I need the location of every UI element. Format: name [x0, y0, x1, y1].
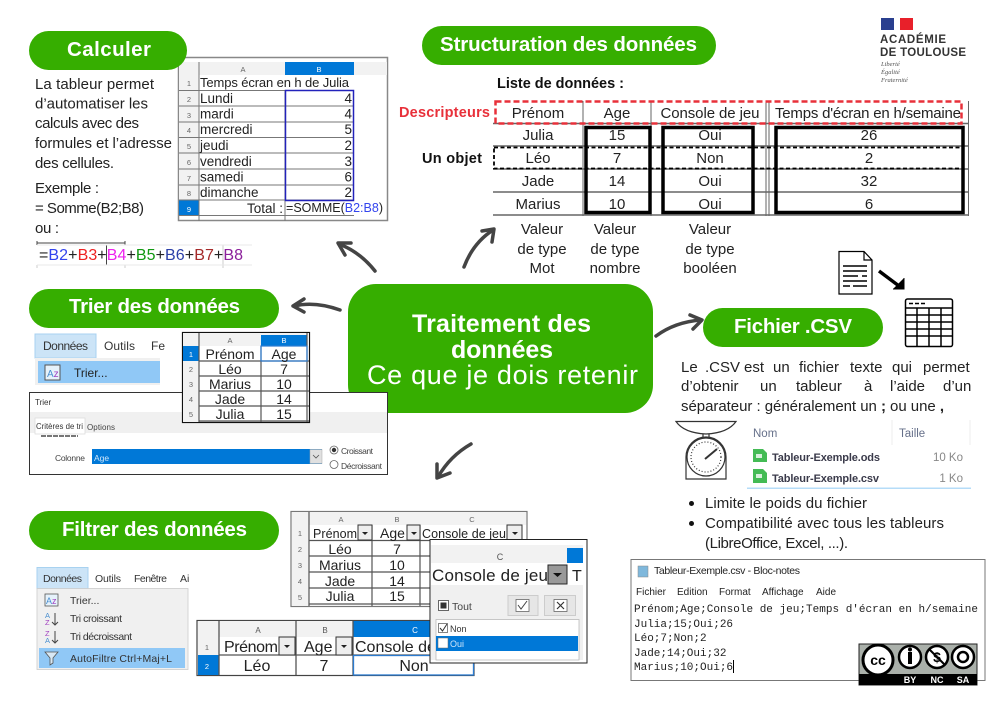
table: liste de données: Marius — [515, 196, 561, 213]
panel: spreadsheet calculer: vendredi — [200, 154, 252, 169]
panel: file list: Nom — [753, 428, 777, 440]
text: types de valeurs: Valeur — [594, 221, 636, 238]
table: résultat du filtre: 2 — [205, 662, 209, 671]
panel: spreadsheet calculer: 4 — [187, 126, 191, 135]
panel: menu AutoFiltre: Données — [43, 573, 82, 585]
table: liste de données: 26 — [861, 127, 877, 144]
panel: file list: 1 Ko — [939, 473, 963, 485]
text: types de valeurs: booléen — [683, 260, 737, 277]
text: calculer description: Exemple : — [35, 180, 99, 197]
panel: liste déroulante du filtre: Console de jeu — [432, 566, 548, 585]
table: résultat du filtre: Console de — [355, 639, 436, 656]
text: calculer description: des cellules. — [35, 155, 114, 172]
panel: spreadsheet calculer: 2 — [344, 138, 352, 153]
panel: spreadsheet calculer: dimanche — [200, 185, 259, 200]
text: calculer description: calculs avec des — [35, 115, 139, 132]
panel: notepad: Affichage — [762, 587, 804, 598]
table: données triées: Prénom — [205, 346, 255, 362]
heading: Structuration des données: Structuration des données — [440, 33, 697, 56]
table: liste de données: Age — [604, 105, 630, 122]
text: définition du CSV: texte — [850, 359, 883, 376]
table: liste de données: Non — [696, 150, 724, 167]
table: données triées: B — [281, 336, 287, 345]
heading: Calculer: Calculer — [67, 38, 151, 61]
table: liste de données: Oui — [698, 127, 722, 144]
panel: menu AutoFiltre: Z — [45, 629, 50, 638]
table: filtre avec boutons: 7 — [393, 541, 401, 557]
table: données triées: Marius — [209, 376, 251, 392]
table: filtre avec boutons: A — [338, 515, 344, 524]
table: filtre avec boutons: 15 — [389, 588, 405, 604]
text: définition du CSV: .CSV — [705, 359, 740, 376]
panel: central title: données — [451, 336, 553, 364]
panel: notepad: Tableur-Exemple.csv - Bloc-notes — [654, 565, 800, 577]
table: filtre avec boutons: 3 — [298, 561, 302, 570]
panel: notepad: Aide — [816, 587, 836, 598]
table: liste de données: 10 — [609, 196, 625, 213]
table: données triées: Léo — [218, 361, 242, 377]
panel: spreadsheet calculer: 4 — [344, 91, 352, 106]
panel: spreadsheet calculer: 5 — [187, 142, 191, 151]
text: définition du CSV: d’obtenir — [681, 378, 739, 395]
text: définition du CSV: un — [773, 359, 790, 376]
icon: document — [839, 252, 872, 294]
table: filtre avec boutons: 4 — [298, 577, 302, 586]
heading: Structuration des données — [422, 26, 716, 65]
text: définition du CSV: qui — [892, 359, 912, 376]
text: calculer description: = Somme(B2;B8) — [35, 200, 144, 217]
panel: spreadsheet calculer: 6 — [187, 158, 191, 167]
icon: licence CC BY NC SA: NC — [930, 675, 944, 685]
panel: dialogue Trier: Trier — [35, 398, 51, 407]
table: filtre avec boutons: Léo — [328, 541, 352, 557]
panel: spreadsheet calculer: 4 — [344, 106, 352, 122]
logo: académie de Toulouse: ACADÉMIE — [880, 33, 946, 46]
panel: file list: Tableur-Exemple.csv — [772, 473, 880, 485]
text: types de valeurs: Mot — [529, 260, 555, 277]
table: filtre avec boutons: Console de jeu — [422, 527, 506, 541]
panel: menu AutoFiltre: A — [45, 636, 50, 645]
table: filtre avec boutons: Julia — [326, 588, 355, 604]
text: définition du CSV: un — [760, 378, 777, 395]
panel: notepad: Marius;10;Oui;6 — [634, 662, 733, 674]
table: liste de données: 7 — [613, 150, 621, 167]
icon: licence CC BY NC SA: $ — [933, 649, 941, 665]
logo: académie de Toulouse: Fraternité — [880, 77, 909, 84]
text: types de valeurs: de type — [517, 241, 567, 258]
panel: menu AutoFiltre: Trier... — [70, 595, 99, 607]
panel: spreadsheet calculer: 1 — [187, 79, 191, 88]
table: liste de données — [493, 101, 969, 216]
table: données triées: A — [227, 336, 233, 345]
panel: dialogue Trier: Décroissant — [341, 461, 383, 471]
panel: menu Trier — [35, 334, 165, 385]
panel: spreadsheet calculer: 3 — [344, 154, 352, 169]
text: calculer description: La tableur permet — [35, 76, 155, 93]
panel: spreadsheet calculer: Temps écran en h de Julia — [200, 75, 350, 90]
table: données triées: 1 — [189, 350, 193, 359]
panel: spreadsheet calculer: Total : — [247, 201, 283, 216]
list: avantages du CSV: (LibreOffice, Excel, ...). — [705, 535, 848, 552]
text: types de valeurs: Valeur — [521, 221, 563, 238]
table: résultat du filtre: Age — [304, 639, 333, 656]
heading: Fichier .CSV: Fichier .CSV — [734, 315, 852, 338]
panel: spreadsheet calculer: B — [316, 65, 322, 74]
text: définition du CSV: à — [864, 378, 873, 395]
table: liste de données: 6 — [865, 196, 873, 213]
table: résultat du filtre: 7 — [320, 658, 329, 675]
panel: file list — [747, 420, 971, 489]
icon: licence CC BY NC SA: BY — [904, 675, 916, 685]
panel: central title: Traitement des — [412, 310, 591, 338]
panel: dialogue Trier — [30, 392, 388, 474]
panel: menu Trier: Données — [43, 339, 88, 353]
list: avantages du CSV — [689, 495, 944, 552]
table: données triées: 10 — [276, 376, 292, 392]
panel: spreadsheet calculer: 7 — [187, 174, 191, 183]
panel: notepad: Format — [719, 587, 751, 598]
panel: menu AutoFiltre — [37, 568, 189, 670]
table: données triées — [182, 332, 310, 422]
icon: licence CC BY NC SA: SA — [957, 675, 970, 685]
panel: spreadsheet calculer: samedi — [200, 170, 244, 184]
text: définition du CSV — [681, 359, 971, 415]
panel: liste déroulante du filtre: Tout — [452, 601, 472, 613]
panel: spreadsheet calculer: 2 — [187, 95, 191, 104]
panel: spreadsheet calculer: 6 — [344, 170, 352, 184]
table: données triées: 14 — [276, 391, 292, 407]
panel: menu AutoFiltre: Fenêtre — [134, 573, 167, 585]
panel: spreadsheet calculer: =SOMME(B2:B8) — [286, 201, 383, 215]
panel: menu AutoFiltre: Ai — [180, 573, 189, 585]
logo: académie de Toulouse: DE TOULOUSE — [880, 47, 966, 59]
panel: liste déroulante du filtre: Oui — [450, 639, 464, 649]
text: définition du CSV: séparateur : généralement un ; ou une , — [681, 398, 944, 415]
table: données triées: Age — [272, 346, 297, 362]
table: liste de données: Oui — [698, 173, 722, 190]
text: définition du CSV: fichier — [799, 359, 839, 376]
table: données triées: 7 — [280, 361, 288, 377]
table: filtre avec boutons: 5 — [298, 593, 302, 602]
panel: dialogue Trier: Options — [87, 423, 115, 432]
formula strip: =B2+B3+B4+B5+B6+B7+B8 — [39, 247, 243, 264]
text: définition du CSV: tableur — [796, 378, 842, 395]
list: avantages du CSV: Compatibilité avec tous les tableurs — [705, 515, 944, 532]
text: calculer description: d’automatiser les — [35, 96, 148, 112]
text: définition du CSV: Le — [681, 359, 698, 376]
heading: Trier des données — [29, 289, 279, 328]
table: liste de données: Temps d'écran en h/semaine — [775, 105, 961, 122]
list: avantages du CSV: Limite le poids du fichier — [705, 495, 867, 512]
panel: liste déroulante du filtre: C — [497, 552, 504, 562]
panel: dialogue Trier: Croissant — [341, 446, 374, 456]
table: filtre avec boutons: B — [394, 515, 400, 524]
table: liste de données: Prénom — [512, 105, 564, 122]
table: liste de données: 32 — [861, 173, 877, 190]
panel: menu Trier: Az — [47, 369, 59, 380]
table: filtre avec boutons: Age — [380, 525, 405, 541]
table: résultat du filtre: B — [322, 626, 328, 635]
text: calculer description: formules et l’adresse — [35, 135, 172, 152]
table: données triées: 15 — [276, 406, 292, 422]
panel: notepad — [631, 560, 985, 680]
panel: liste déroulante du filtre: T — [572, 568, 582, 585]
table: données triées: 3 — [189, 380, 193, 389]
panel: menu AutoFiltre: Z — [45, 618, 50, 627]
arrow: to Fichier CSV — [656, 315, 702, 336]
panel: menu Trier: Outils — [104, 339, 135, 353]
panel: file list: 10 Ko — [933, 452, 963, 464]
text: Liste de données: Liste de données : — [497, 76, 624, 92]
text: types de valeurs — [517, 221, 737, 277]
text: définition du CSV: permet — [923, 359, 971, 376]
panel: notepad: Prénom;Age;Console de jeu;Temps d'écran en h/semaine — [634, 604, 978, 616]
table: filtre avec boutons: 10 — [389, 557, 405, 573]
arrow: to Structuration — [464, 229, 494, 267]
panel: menu AutoFiltre: Tri croissant — [70, 613, 122, 625]
table: filtre avec boutons: Jade — [325, 573, 355, 589]
label: Descripteurs: Descripteurs — [399, 105, 490, 121]
text: types de valeurs: Valeur — [689, 221, 731, 238]
icon: arrow document to table — [879, 271, 904, 289]
arrow: to Calculer — [338, 243, 375, 271]
panel: menu AutoFiltre: Tri décroissant — [70, 631, 132, 643]
icon: licence CC BY NC SA — [859, 644, 977, 685]
panel: notepad: Julia;15;Oui;26 — [634, 619, 733, 631]
panel: central title — [348, 284, 653, 413]
text: définition du CSV: est — [744, 359, 765, 376]
panel: menu Trier: Trier... — [74, 366, 108, 380]
panel: spreadsheet calculer: 9 — [187, 205, 191, 214]
table: liste de données: Console de jeu — [660, 105, 760, 122]
panel: notepad: Edition — [677, 587, 708, 598]
table: filtre avec boutons: Prénom — [313, 527, 357, 541]
table: filtre avec boutons: 2 — [298, 545, 302, 554]
table: données triées: Jade — [215, 391, 245, 407]
table: résultat du filtre: 1 — [205, 643, 209, 652]
panel: liste déroulante du filtre — [430, 540, 587, 663]
table: résultat du filtre: C — [412, 626, 418, 635]
table: filtre avec boutons — [291, 512, 527, 606]
table: liste de données: Léo — [525, 150, 551, 167]
icon: balance — [676, 422, 736, 479]
table: résultat du filtre: Prénom — [224, 639, 278, 656]
panel: dialogue Trier: Colonne — [55, 453, 85, 463]
panel: spreadsheet calculer: mercredi — [200, 122, 253, 137]
table: liste de données: Julia — [523, 127, 554, 144]
heading: Trier des données: Trier des données — [69, 295, 240, 318]
panel: spreadsheet calculer: 2 — [344, 185, 352, 200]
panel: spreadsheet calculer: 5 — [344, 122, 352, 137]
panel: spreadsheet calculer: A — [240, 65, 246, 74]
table: données triées: 5 — [189, 410, 193, 419]
table: données triées: 2 — [189, 365, 193, 374]
panel: spreadsheet calculer: jeudi — [199, 138, 229, 153]
text: calculer description: ou : — [35, 220, 59, 237]
panel: menu AutoFiltre: Outils — [95, 573, 121, 585]
table: liste de données: Jade — [522, 173, 554, 190]
text: types de valeurs: nombre — [590, 260, 640, 277]
panel: menu Trier: Fe — [151, 339, 165, 353]
heading: Filtrer des données — [29, 511, 279, 550]
text: définition du CSV: d’un — [943, 378, 971, 395]
panel: dialogue Trier: Critères de tri — [36, 422, 83, 431]
table: liste de données: 14 — [609, 173, 625, 190]
heading: Calculer — [29, 31, 187, 70]
panel: notepad: Léo;7;Non;2 — [634, 633, 707, 645]
table: filtre avec boutons: C — [469, 515, 475, 524]
heading: Fichier .CSV — [703, 308, 883, 347]
panel: menu AutoFiltre: A — [45, 611, 50, 620]
arrow: to Trier — [293, 299, 340, 312]
table: données triées: Julia — [216, 406, 245, 422]
logo: académie de Toulouse — [880, 18, 966, 84]
text: types de valeurs: de type — [590, 241, 640, 258]
logo: académie de Toulouse: Égalité — [880, 68, 901, 76]
table: résultat du filtre: A — [255, 626, 261, 635]
panel: spreadsheet calculer: Lundi — [200, 91, 233, 106]
panel: menu AutoFiltre: Az — [46, 596, 57, 606]
logo: académie de Toulouse: Liberté — [880, 61, 901, 68]
panel: spreadsheet calculer: mardi — [200, 106, 234, 122]
table: liste de données: 15 — [609, 127, 625, 144]
panel: central title: Ce que je dois retenir — [367, 360, 638, 390]
table: filtre avec boutons: Marius — [319, 557, 361, 573]
panel: spreadsheet calculer: 8 — [187, 189, 191, 198]
panel: notepad: Jade;14;Oui;32 — [634, 648, 726, 660]
text: types de valeurs: de type — [685, 241, 735, 258]
panel: file list: Taille — [899, 428, 925, 440]
panel: spreadsheet calculer — [178, 58, 388, 221]
panel: file list: Tableur-Exemple.ods — [772, 452, 880, 464]
text: définition du CSV: l’aide — [890, 378, 925, 395]
icon: licence CC BY NC SA: cc — [870, 652, 886, 668]
panel: liste déroulante du filtre: Non — [450, 624, 467, 634]
table: filtre avec boutons: 14 — [389, 573, 405, 589]
formula strip — [37, 241, 252, 268]
panel: dialogue Trier: Age — [94, 453, 109, 463]
table: résultat du filtre — [197, 620, 474, 676]
text: calculer description — [35, 76, 172, 237]
icon: table — [906, 299, 952, 346]
table: filtre avec boutons: 1 — [298, 529, 302, 538]
heading: Filtrer des données: Filtrer des données — [62, 518, 247, 541]
label: Un objet: Un objet — [422, 151, 482, 167]
table: résultat du filtre: Léo — [244, 658, 270, 675]
panel: spreadsheet calculer: 3 — [187, 111, 191, 120]
panel: notepad: Fichier — [636, 587, 667, 598]
table: résultat du filtre: Non — [399, 658, 429, 675]
table: données triées: 4 — [189, 395, 193, 404]
table: liste de données: 2 — [865, 150, 873, 167]
panel: menu AutoFiltre: AutoFiltre Ctrl+Maj+L — [70, 653, 172, 665]
arrow: to Filtrer — [437, 444, 471, 478]
table: liste de données: Oui — [698, 196, 722, 213]
